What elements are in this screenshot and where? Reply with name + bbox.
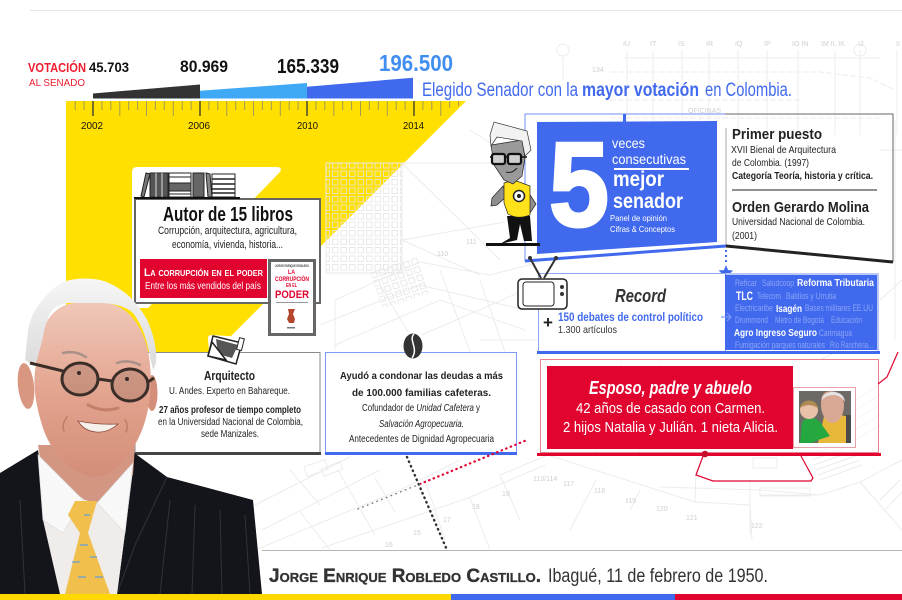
- icon: coffee bean: [404, 334, 422, 358]
- neck: [38, 445, 135, 503]
- bottom rule: [262, 550, 902, 551]
- text: veces consecutivas mejor senador: mejor: [613, 168, 664, 191]
- panel: debate topics: Reficar: [735, 278, 757, 289]
- label: votación al senado: VOTACIÓN: [28, 60, 86, 75]
- panel: debate topics: Drummond: [735, 315, 768, 326]
- blueprint labels: 117: [563, 481, 574, 488]
- book cover: [270, 260, 314, 334]
- panel: deudas cafeteras: [325, 334, 517, 455]
- panel: debate topics: Metro de Bogotá: [775, 315, 824, 326]
- icon: television: [518, 256, 567, 309]
- blueprint labels: 121: [686, 515, 698, 522]
- collar: [38, 455, 133, 533]
- big number 5: 5: [549, 118, 609, 252]
- text: primer puesto: [731, 126, 873, 182]
- blueprint labels: IJ: [858, 41, 863, 48]
- text: arquitecto: en la Universidad Nacional de Colombia,: [158, 417, 303, 428]
- icon: books: [141, 173, 235, 197]
- blueprint labels: 122: [751, 523, 763, 530]
- year labels: 2014: [403, 120, 424, 132]
- panel: 5 veces mejor senador: [525, 114, 893, 264]
- heading: record: Record: [615, 286, 667, 306]
- text: primer puesto: Primer puesto: [732, 126, 822, 143]
- headline: elegido senador: Elegido Senador con la: [422, 80, 578, 101]
- blueprint labels: 134: [592, 67, 604, 74]
- vote numbers: 80.969: [180, 57, 228, 76]
- text: orden gerardo molina: Universidad Nacional de Colombia.: [732, 216, 865, 228]
- panel: debate topics: Bases militares EE.UU: [805, 303, 873, 314]
- text: veces consecutivas mejor senador: veces: [612, 135, 645, 151]
- brows, nose and smile: [63, 352, 140, 432]
- text: arquitecto: 27 años profesor de tiempo completo: [159, 405, 301, 416]
- blueprint labels: OFICINAS: [688, 108, 721, 115]
- arrow: record to topics: [721, 313, 731, 321]
- callout: la corrupción en el poder: La corrupción en el poder: [144, 267, 263, 279]
- panel: debate topics: Saludcoop: [762, 278, 794, 289]
- headline: elegido senador: mayor votación: [582, 80, 699, 101]
- vote numbers: 196.500: [379, 50, 453, 76]
- year labels: 2002: [81, 120, 103, 132]
- year labels: 2010: [297, 120, 318, 132]
- vote numbers: [89, 50, 453, 78]
- text: arquitecto: sede Manizales.: [201, 429, 259, 440]
- blueprint labels: 119: [625, 498, 636, 505]
- panel: debate topics: TLC: [736, 289, 753, 303]
- blueprint labels: 17: [443, 517, 451, 524]
- suit: [0, 450, 262, 594]
- text: veces consecutivas mejor senador: senador: [613, 190, 683, 213]
- panel: record: [518, 256, 880, 354]
- blueprint labels: IS: [678, 41, 685, 48]
- panel: esposo, padre y abuelo: [537, 352, 898, 481]
- blueprint labels: IP: [764, 41, 771, 48]
- dotted connector lines: [358, 440, 527, 550]
- text: veces consecutivas mejor senador: [610, 135, 689, 234]
- blueprint labels: II: [896, 41, 900, 48]
- icon: mascot caricature: [486, 122, 540, 246]
- text: deudas: Antecedentes de Dignidad Agropecuaria: [349, 434, 494, 445]
- text: veces consecutivas mejor senador: consecutivas: [612, 151, 686, 167]
- bottom colour stripe: [0, 594, 902, 600]
- year labels: [81, 120, 424, 132]
- text: debates: [558, 312, 703, 336]
- suit pinstripes and lapels: [20, 477, 250, 594]
- blueprint labels: IU: [623, 41, 630, 48]
- text: orden gerardo molina: (2001): [732, 230, 757, 242]
- star: [718, 265, 733, 280]
- blueprint labels: IR: [706, 41, 713, 48]
- blueprint labels: 16: [385, 542, 393, 549]
- book cover: CORRUPCIÓN: [275, 275, 309, 283]
- year labels: 2006: [188, 120, 210, 132]
- text: veces consecutivas mejor senador: Panel de opinión: [610, 213, 667, 223]
- blueprint labels: 18: [472, 504, 480, 511]
- text: veces consecutivas mejor senador: Cifras & Conceptos: [610, 224, 675, 234]
- blueprint labels: 15: [413, 530, 421, 537]
- white backing behind icons: [208, 331, 428, 352]
- blueprint labels: IM IL IK: [821, 41, 845, 48]
- panel: debate topics: Telecom: [757, 291, 781, 302]
- text: primer puesto: Categoría Teoría, historia y crítica.: [732, 170, 873, 182]
- hair: [25, 278, 156, 370]
- text: familia: 2 hijos Natalia y Julián. 1 nieta Alicia.: [563, 420, 778, 436]
- footer: name and birth: [269, 566, 768, 587]
- glasses: [30, 363, 154, 401]
- text: arquitecto: U. Andes. Experto en Bahareque.: [169, 386, 290, 397]
- text: primer puesto: de Colombia. (1997): [732, 157, 809, 169]
- icon: plan and square: [208, 336, 244, 364]
- text: deudas: [340, 370, 503, 445]
- panel: arquitecto: [135, 336, 321, 455]
- headline: elegido senador: [422, 80, 792, 101]
- text: temas: [158, 225, 297, 251]
- blueprint labels: 118: [594, 488, 605, 495]
- panel: debate topics: Educación: [831, 315, 862, 326]
- blueprint labels: 120: [656, 506, 668, 513]
- headline: elegido senador: en Colombia.: [705, 80, 792, 101]
- text: primer puesto: XVII Bienal de Arquitectura: [731, 144, 836, 156]
- callout: la corrupción en el poder: Entre los más vendidos del país: [145, 281, 261, 292]
- family photo: [794, 388, 856, 448]
- text: familia: 42 años de casado con Carmen.: [576, 401, 765, 417]
- face: [34, 303, 151, 477]
- yellow background ruler shape: [66, 101, 466, 352]
- text: temas: Corrupción, arquitectura, agricultura,: [158, 225, 297, 237]
- text: deudas: de 100.000 familias cafeteras.: [352, 387, 491, 399]
- blueprint labels: IT: [650, 41, 657, 48]
- tie: [65, 501, 110, 594]
- text: deudas: Salvación Agropecuaria.: [379, 419, 464, 430]
- panel: autor de 15 libros: [134, 197, 320, 334]
- vote numbers: 165.339: [277, 56, 339, 78]
- blueprint labels: 111: [466, 239, 477, 246]
- blueprint labels: 110: [437, 251, 448, 258]
- heading: autor: Autor de 15 libros: [163, 204, 293, 226]
- text: arquitecto: Arquitecto: [204, 368, 255, 383]
- red connector lines: [696, 352, 898, 481]
- blueprint labels: 113/114: [533, 476, 557, 483]
- text: debates: 1.300 artículos: [558, 324, 617, 336]
- ears: [16, 362, 36, 410]
- callout: la corrupción en el poder: [140, 259, 267, 298]
- white backing behind books: [132, 167, 281, 308]
- book cover: LA: [288, 270, 296, 276]
- blueprint background: [255, 44, 902, 550]
- text: familia: Esposo, padre y abuelo: [589, 378, 752, 398]
- panel: debate topics: Carimagua: [819, 328, 853, 339]
- text: deudas: Ayudó a condonar las deudas a más: [340, 370, 503, 382]
- label: votación al senado: [28, 60, 86, 89]
- panel: debate topics: Río Rancheria...: [830, 340, 873, 351]
- text: orden gerardo molina: Orden Gerardo Molina: [732, 199, 870, 216]
- panel: debate topics: [725, 274, 878, 351]
- text: debates: 150 debates de control político: [558, 312, 703, 324]
- blueprint labels: 19: [502, 491, 510, 498]
- footer: name and birth: Jorge Enrique Robledo Castillo.: [269, 566, 541, 587]
- panel: debate topics: Fumigación parques naturales: [735, 340, 825, 351]
- panel: debate topics: Baldíos y Urrutia: [786, 291, 837, 302]
- vote timeline: [28, 50, 459, 132]
- text: temas: economía, vivienda, historia...: [172, 239, 283, 251]
- blueprint labels: [385, 41, 900, 549]
- book cover: JORGE ENRIQUE ROBLEDO: [275, 264, 309, 268]
- panel: debate topics: Electricaribe: [735, 303, 773, 314]
- text: arquitecto: [158, 368, 303, 440]
- text: familia: [563, 378, 778, 436]
- shirt: [38, 456, 133, 594]
- ruler ticks: [75, 101, 459, 116]
- text: orden gerardo molina: [732, 199, 870, 242]
- book cover: PODER: [275, 289, 309, 301]
- text: deudas: Cofundador de Unidad Cafetera y: [362, 403, 480, 414]
- blueprint labels: IO IN: [792, 41, 808, 48]
- vote wedges: [93, 78, 413, 98]
- label: votación al senado: AL SENADO: [29, 77, 85, 89]
- blueprint labels: IQ: [735, 41, 743, 48]
- panel: debate topics: Reforma Tributaria: [797, 278, 874, 289]
- panel: debate topics: Agro Ingreso Seguro: [734, 328, 817, 339]
- panel: debate topics: Isagén: [776, 304, 802, 315]
- vote numbers: 45.703: [89, 59, 129, 75]
- book cover: EN EL: [286, 283, 297, 289]
- footer: name and birth: Ibagué, 11 de febrero de 1950.: [548, 566, 768, 587]
- portrait photo: [0, 278, 262, 594]
- plus sign: +: [543, 313, 553, 332]
